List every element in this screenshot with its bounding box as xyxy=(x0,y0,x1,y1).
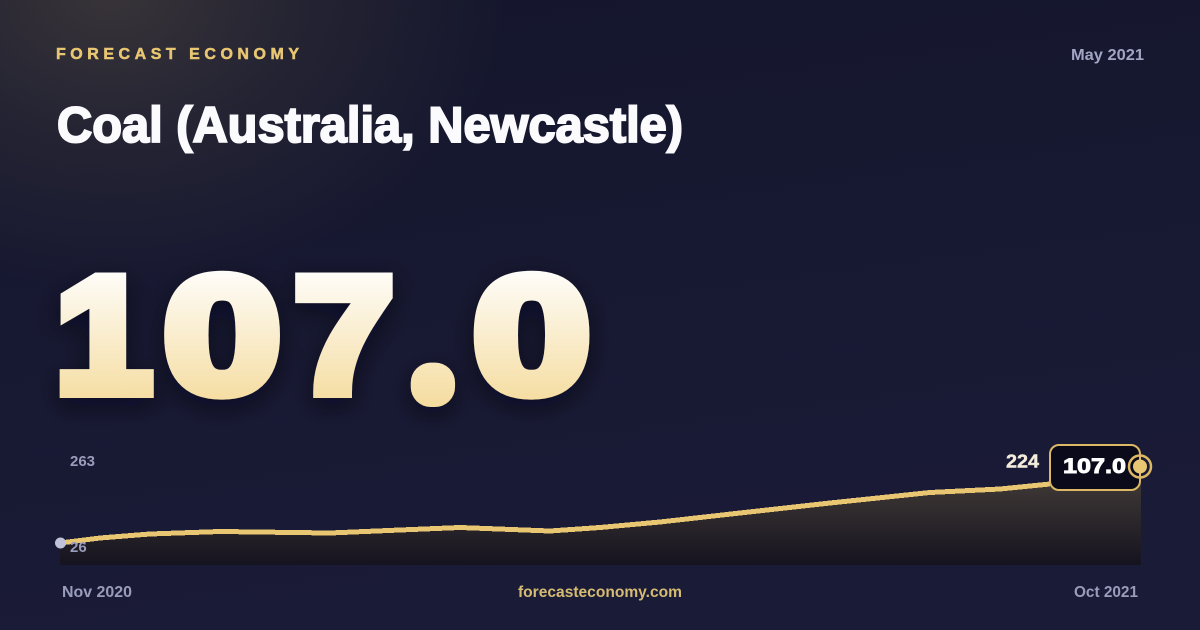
value callout xyxy=(1050,445,1140,490)
start date label: Nov 2020 xyxy=(62,584,132,601)
big value: 7 xyxy=(294,243,394,427)
title: Coal (Australia, Newcastle) xyxy=(57,97,683,153)
chart xyxy=(55,445,1151,565)
area under line xyxy=(60,470,1141,565)
website label: forecasteconomy.com xyxy=(518,584,682,601)
end date label: Oct 2021 xyxy=(1074,584,1138,601)
big value: . xyxy=(429,361,437,394)
big value: 0 xyxy=(473,243,590,428)
date label: May 2021 xyxy=(1071,47,1144,64)
big value: 0 xyxy=(164,243,281,428)
price line xyxy=(60,484,1050,543)
big value xyxy=(55,243,590,428)
value callout: 107.0 xyxy=(1063,455,1126,478)
previous value label: 224 xyxy=(1006,452,1039,472)
brand label: FORECAST ECONOMY xyxy=(56,46,299,63)
start point xyxy=(55,538,66,548)
end marker xyxy=(1129,456,1151,478)
big value: 1 xyxy=(55,244,152,428)
axis max label: 263 xyxy=(70,453,95,470)
axis min label: 26 xyxy=(70,539,87,556)
